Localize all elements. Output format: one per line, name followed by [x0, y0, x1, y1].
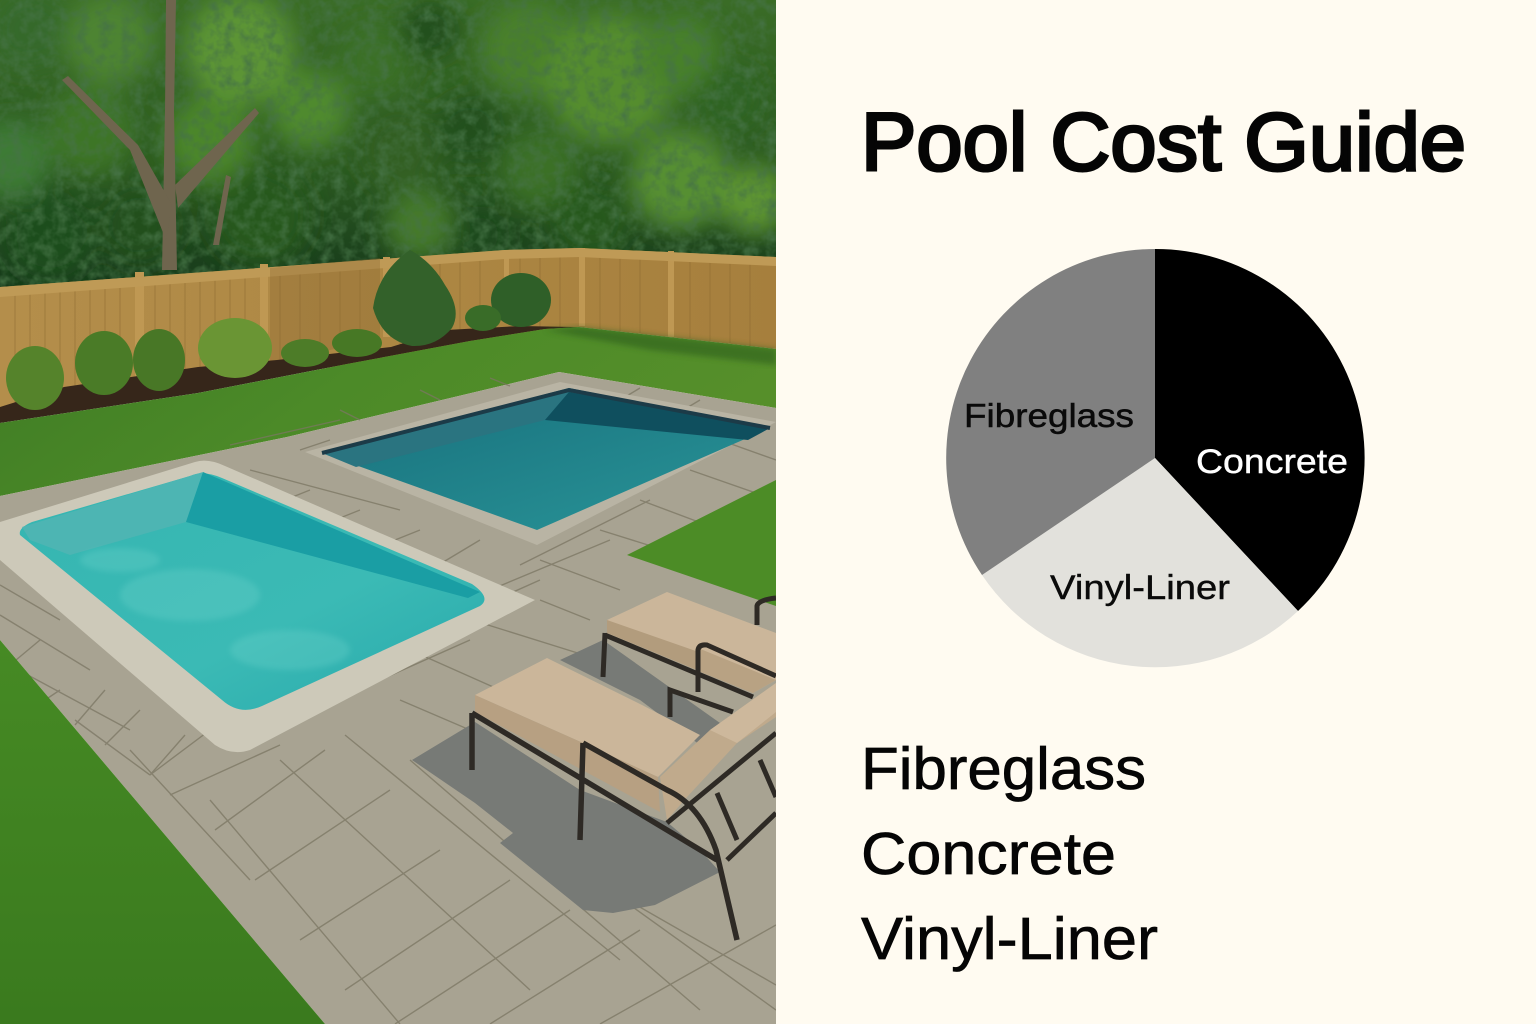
back chair armrests — [698, 598, 776, 692]
front pool coping — [0, 461, 535, 752]
lounger shadows — [412, 640, 720, 913]
front chair frame — [472, 713, 737, 940]
back chair frame — [603, 633, 753, 697]
front pool — [0, 461, 535, 752]
back pool left wall — [322, 392, 569, 467]
paving joints — [0, 378, 776, 1024]
back pool — [305, 382, 776, 545]
label: Fibreglass: Fibreglass — [964, 397, 1134, 434]
mulch bed — [0, 326, 579, 423]
front chair rear legs and diagonal struts — [667, 690, 776, 860]
water highlights — [80, 548, 350, 670]
back lawn — [0, 327, 776, 496]
right lawn — [627, 480, 776, 606]
front lounge chair — [472, 658, 776, 940]
lawn shade near fence — [545, 327, 776, 365]
back chair cushion — [607, 592, 776, 693]
slice: fibreglass — [946, 249, 1155, 575]
front lawn — [0, 640, 325, 1024]
patio paving — [0, 372, 776, 1024]
label: Vinyl-Liner: Vinyl-Liner — [1050, 569, 1230, 607]
list item: Concrete: Concrete — [861, 821, 1116, 887]
list item: Fibreglass: Fibreglass — [861, 736, 1146, 802]
front chair seat cushion — [475, 658, 700, 777]
label: Concrete: Concrete — [1196, 443, 1348, 481]
list item: Vinyl-Liner: Vinyl-Liner — [861, 906, 1158, 972]
back pool coping — [305, 382, 776, 545]
back pool rear wall — [545, 392, 770, 440]
back pool floor — [358, 388, 744, 530]
pie chart — [946, 249, 1365, 667]
front chair back cushion — [660, 712, 776, 820]
title: Pool Cost Guide — [861, 97, 1466, 188]
shrubs — [6, 250, 551, 410]
wooden fence — [0, 248, 776, 420]
slice: concrete — [1155, 249, 1365, 611]
front pool floor — [20, 473, 484, 710]
back lounge chair — [603, 592, 776, 697]
front pool right wall — [186, 472, 480, 598]
list of pool types — [861, 736, 1158, 972]
back pool rim — [322, 390, 770, 453]
slice: vinyl-liner — [982, 458, 1298, 667]
tree trunk and branches — [62, 0, 259, 270]
trees backdrop — [0, 0, 790, 310]
photo: backyard with two pools — [0, 0, 790, 1024]
front pool left wall — [22, 472, 203, 555]
